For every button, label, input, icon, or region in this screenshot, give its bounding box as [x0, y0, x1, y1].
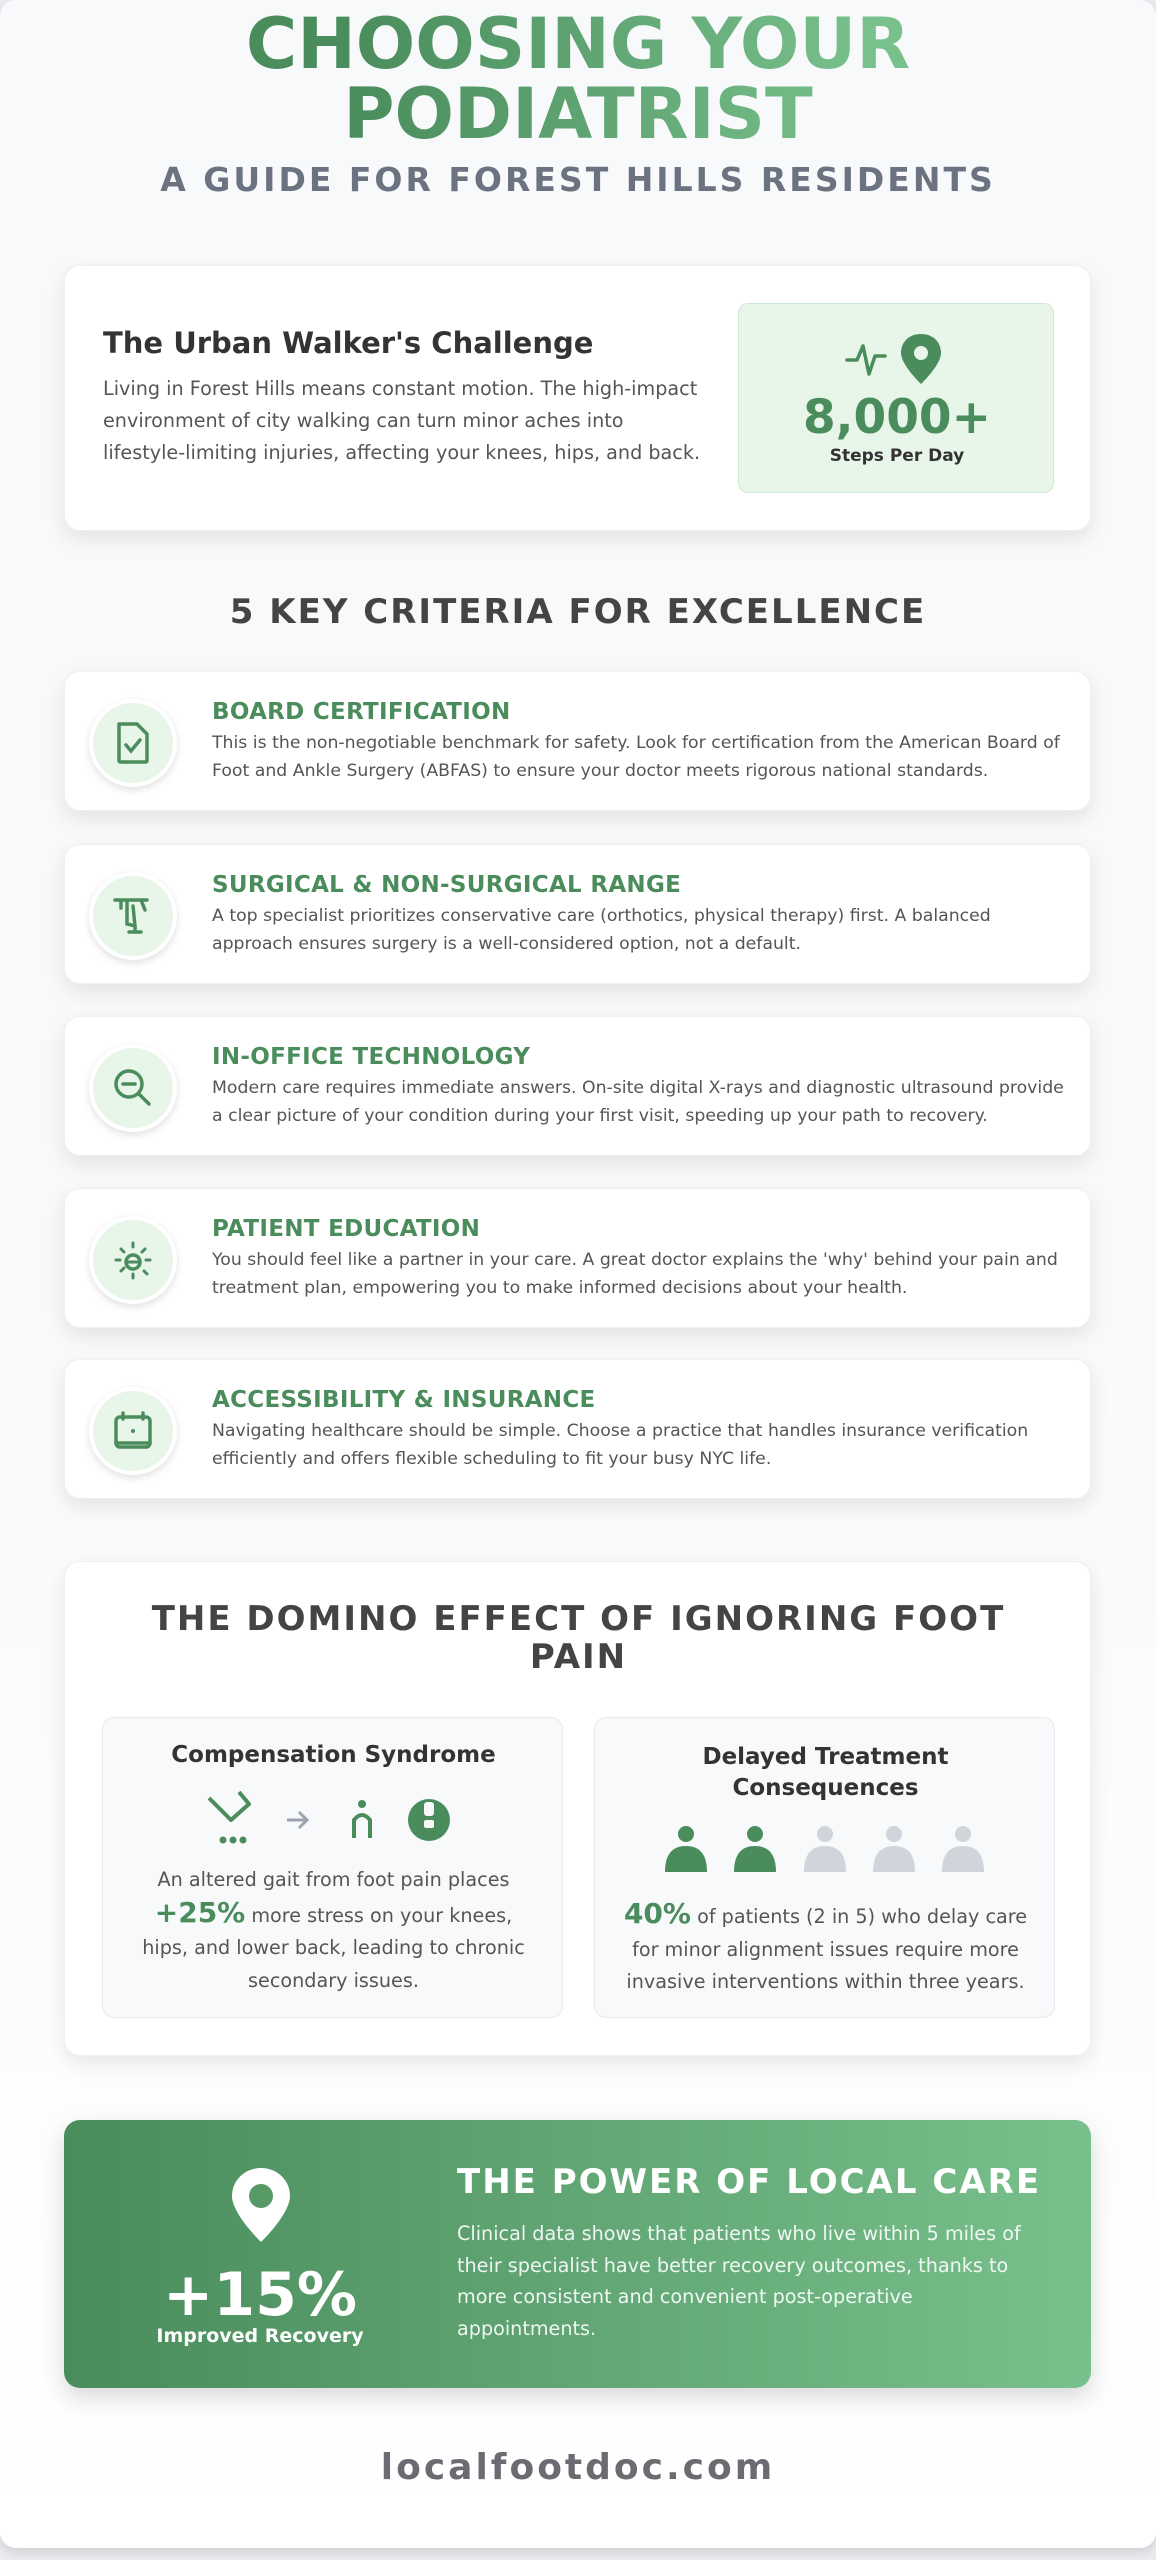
sub-panel: compensation syndrome: [102, 1717, 563, 2018]
stat label: Improved Recovery: [156, 2325, 364, 2347]
heading: Consequences: [732, 1775, 919, 1801]
heading: SURGICAL & NON-SURGICAL RANGE: [212, 872, 681, 898]
text: Modern care requires immediate answers. On-site digital X-rays and diagnostic ultrasound provide a clear picture of your condition during your first visit, speeding up your path to recovery.: [212, 1078, 1064, 1126]
panel: power of local care: [64, 2120, 1091, 2388]
subtitle: A GUIDE FOR FOREST HILLS RESIDENTS: [160, 160, 996, 199]
icon: magnifier: [89, 1044, 177, 1132]
text: A top specialist prioritizes conservative care (orthotics, physical therapy) first. A balanced approach ensures surgery is a well-considered option, not a default.: [212, 906, 991, 954]
panel: in-office technology: [64, 1016, 1091, 1156]
panel: patient education: [64, 1188, 1091, 1328]
sub-panel: delayed treatment: [594, 1717, 1055, 2018]
text block: urban walker: Living in Forest Hills means constant motion. The high-impact environment of city walking can turn minor aches into lifestyle-limiting injuries, affecting your knees, hips, and back.: [103, 377, 700, 464]
heading: 5 key criteria: 5 KEY CRITERIA FOR EXCELLENCE: [230, 592, 926, 632]
text: You should feel like a partner in your care. A great doctor explains the 'why' behind your pain and treatment plan, empowering you to make informed decisions about your health.: [212, 1250, 1058, 1298]
heading: Compensation Syndrome: [171, 1742, 496, 1768]
heading: urban walker: The Urban Walker's Challenge: [103, 326, 593, 360]
text block: Clinical data shows that patients who live within 5 miles of their specialist have better recovery outcomes, thanks to more consistent and convenient post-operative appointments.: [457, 2222, 1021, 2340]
title: CHOOSING YOUR: [246, 3, 910, 85]
stat label: Steps Per Day: [830, 446, 964, 466]
panel: surgical range: [64, 844, 1091, 984]
heading: domino effect: [152, 1599, 1005, 1677]
icon: location pin: [232, 2168, 290, 2242]
heading: domino effect: THE DOMINO EFFECT OF IGNORING FOOT: [152, 1599, 1005, 1639]
icon: pulse and pin: [845, 334, 941, 384]
panel: domino effect: [64, 1561, 1091, 2056]
panel: board certification: [64, 671, 1091, 811]
icon: certificate: [89, 699, 177, 787]
heading: [702, 1744, 948, 1801]
heading: ACCESSIBILITY & INSURANCE: [212, 1387, 596, 1413]
heading: power of local care: THE POWER OF LOCAL CARE: [457, 2162, 1041, 2202]
heading: IN-OFFICE TECHNOLOGY: [212, 1044, 530, 1070]
stat: +15%: +15%: [163, 2260, 357, 2330]
title: PODIATRIST: [343, 73, 813, 155]
text: This is the non-negotiable benchmark for safety. Look for certification from the American Board of Foot and Ankle Surgery (ABFAS) to ensure your doctor meets rigorous national standards.: [212, 733, 1060, 781]
text block with stat 40%: 40% of patients (2 in 5) who delay care for minor alignment issues require more invasive interventions within three years.: [624, 1897, 1027, 1993]
stat number: 8,000+: [803, 390, 991, 445]
heading: PATIENT EDUCATION: [212, 1216, 480, 1242]
heading: BOARD CERTIFICATION: [212, 699, 511, 725]
icon: lightbulb: [89, 1216, 177, 1304]
text: Navigating healthcare should be simple. Choose a practice that handles insurance verification efficiently and offers flexible scheduling to fit your busy NYC life.: [212, 1421, 1028, 1469]
footer: website: localfootdoc.com: [381, 2447, 775, 2488]
icon: treatment: [89, 872, 177, 960]
title: [0, 9, 1156, 149]
text block with stat +25%: An altered gait from foot pain places +25% more stress on your knees, hips, and lower back, leading to chronic secondary issues.: [142, 1868, 525, 1992]
icon row: 2 of 5 people: [665, 1826, 984, 1872]
icon row: foot to body: [208, 1790, 450, 1844]
stat box: steps per day: [738, 303, 1054, 493]
heading: Delayed Treatment: [702, 1744, 948, 1770]
icon: calendar: [89, 1387, 177, 1475]
panel: accessibility: [64, 1359, 1091, 1499]
panel: urban walker's challenge: [64, 265, 1091, 531]
heading: domino effect: PAIN: [530, 1637, 627, 1677]
